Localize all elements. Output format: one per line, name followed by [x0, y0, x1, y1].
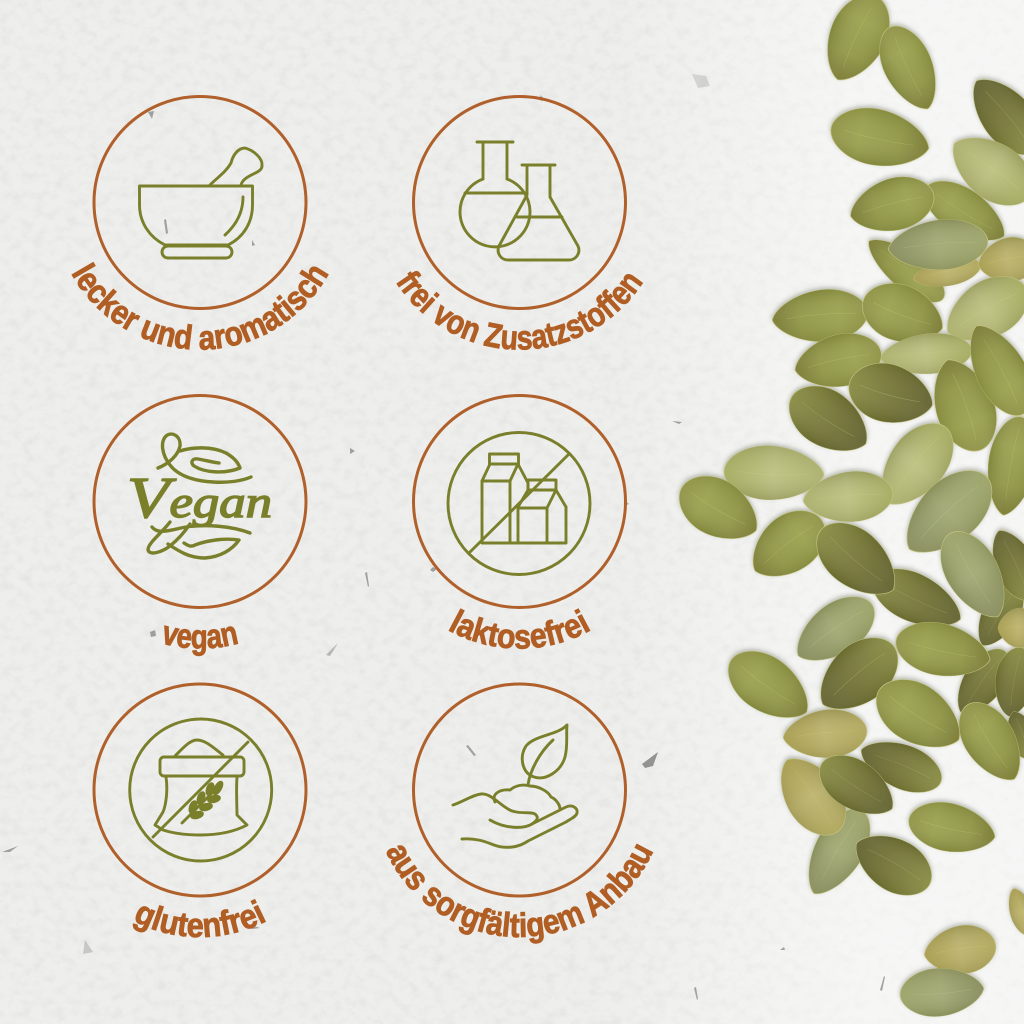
- icon: vegan script logo: [127, 434, 272, 558]
- label: vegan: [164, 625, 238, 656]
- icon: crossed-out milk cartons: [448, 432, 590, 574]
- label: laktosefrei: [448, 608, 590, 650]
- wheat kernels: [188, 780, 224, 819]
- lower leaf flourish: [148, 522, 250, 558]
- badge: aus sorgfältigem Anbau: [386, 682, 654, 944]
- ring: [94, 396, 306, 608]
- icon: mortar and pestle: [140, 148, 262, 258]
- icon: crossed-out flour sack with wheat: [130, 719, 272, 861]
- badge: frei von Zusatzstoffen: [396, 95, 644, 350]
- upper leaf flourish: [158, 434, 251, 482]
- badge: vegan: [92, 394, 308, 692]
- pumpkin seeds scattered on the right: [668, 0, 1024, 1020]
- badge: glutenfrei: [92, 682, 308, 938]
- ring: [94, 96, 306, 308]
- badge: lecker und aromatisch: [71, 95, 329, 350]
- label: lecker und aromatisch: [71, 262, 329, 350]
- label: aus sorgfältigem Anbau: [386, 844, 654, 944]
- ring: [414, 684, 626, 896]
- label: frei von Zusatzstoffen: [396, 270, 644, 350]
- ring: [414, 396, 626, 608]
- icon: laboratory flasks: [460, 142, 579, 260]
- badge: laktosefrei: [412, 394, 627, 697]
- script word: Vegan: [127, 465, 272, 530]
- ring: [414, 96, 626, 308]
- label: glutenfrei: [132, 898, 266, 938]
- ring: [94, 684, 306, 896]
- icon: hand holding seedling: [453, 725, 577, 847]
